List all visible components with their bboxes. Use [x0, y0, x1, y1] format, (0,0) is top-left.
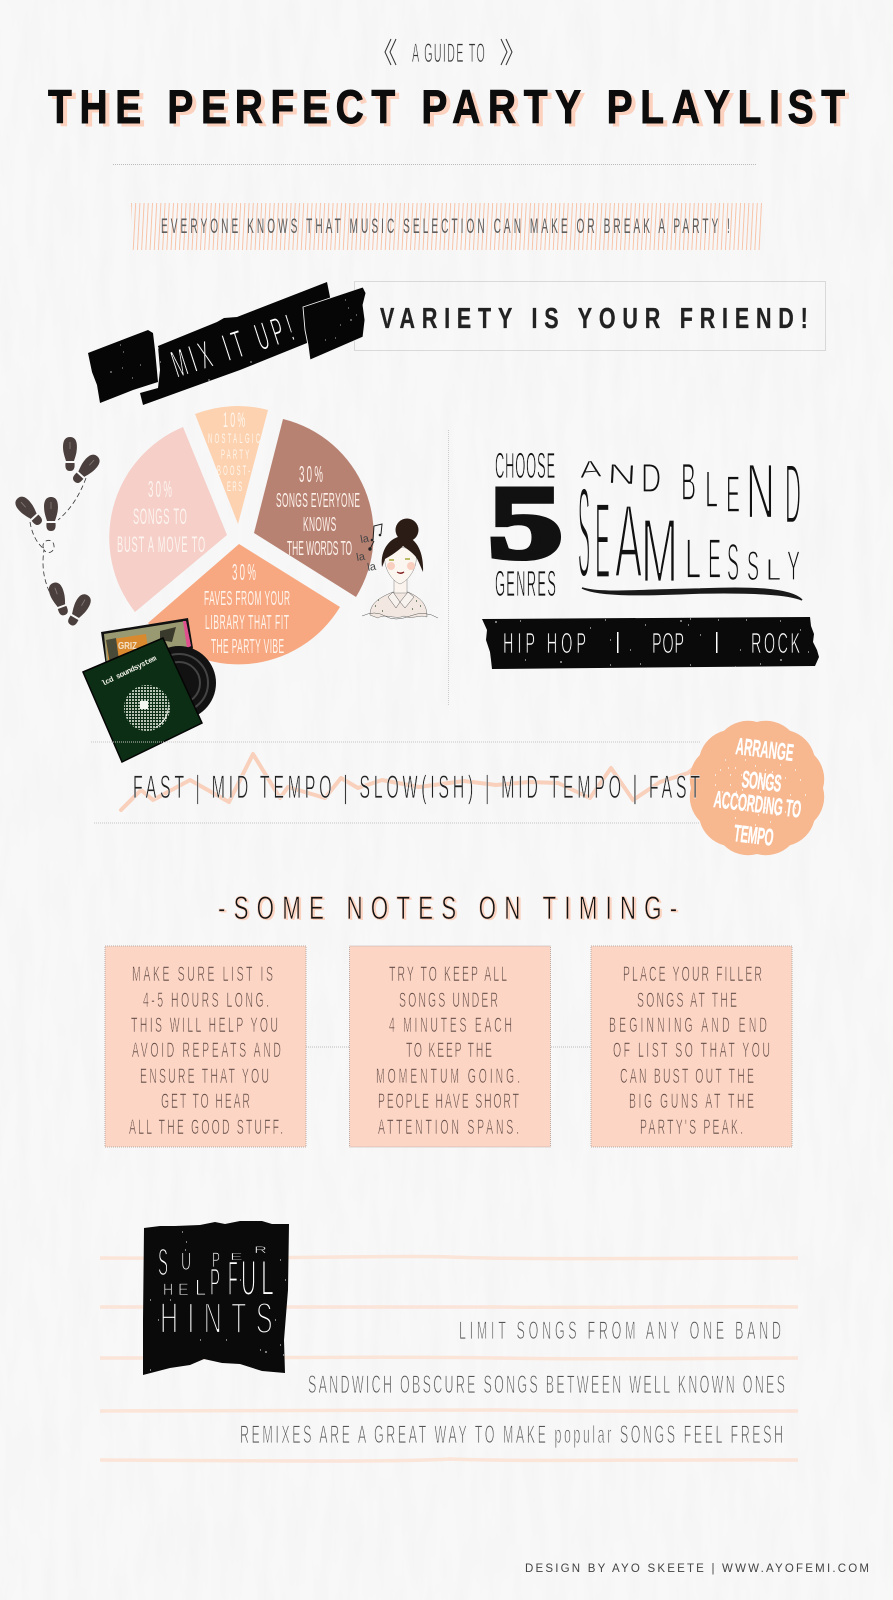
- choose 5 genres: CHOOSE: [495, 446, 555, 486]
- variety callout box: VARIETY IS YOUR FRIEND!: [380, 303, 808, 335]
- ground line: [362, 613, 438, 619]
- choose 5 genres: GENRES: [495, 564, 556, 604]
- griz album: [101, 618, 193, 680]
- hand lettering: and blend seamlessly: A: [579, 456, 603, 484]
- right tape: [303, 287, 366, 360]
- panel: note 2: SONGS UNDER: [399, 988, 498, 1012]
- banner: super helpful hints: U: [181, 1249, 191, 1276]
- panel: note 3: OF LIST SO THAT YOU: [613, 1038, 770, 1062]
- slice: 30% songs to bust a move to: BUST A MOVE TO: [117, 532, 205, 557]
- badge: arrange songs according to tempo: [690, 721, 824, 855]
- music notes: la: [355, 550, 367, 564]
- icon: dancing footprints: [12, 437, 103, 628]
- hand lettering: and blend seamlessly: L: [766, 553, 781, 587]
- hint 1: LIMIT SONGS FROM ANY ONE BAND: [459, 1317, 781, 1345]
- slice: 10% nostalgic party boosters: BOOST-: [217, 463, 250, 479]
- hint 2: SANDWICH OBSCURE SONGS BETWEEN WELL KNOWN ONES: [308, 1371, 785, 1399]
- panel: note 3: [591, 946, 792, 1147]
- hair: [382, 536, 423, 572]
- panel: note 3: BIG GUNS AT THE: [629, 1089, 754, 1113]
- hint 3: REMIXES ARE A GREAT WAY TO MAKE popular SONGS FEEL FRESH: [240, 1421, 783, 1449]
- neck: [394, 578, 407, 593]
- panel: note 1: [105, 946, 306, 1147]
- banner: genres tape: [482, 617, 819, 669]
- griz album: GRIZ: [118, 641, 137, 652]
- hand lettering: and blend seamlessly: L: [705, 461, 718, 519]
- panel: note 1: ALL THE GOOD STUFF.: [129, 1115, 283, 1139]
- intro striped band: EVERYONE KNOWS THAT MUSIC SELECTION CAN MAKE OR BREAK A PARTY !: [161, 215, 730, 238]
- lcd soundsystem sleeve: lcd soundsystem: [101, 655, 159, 689]
- hand lettering: and blend seamlessly: E: [708, 527, 721, 591]
- badge: arrange songs according to tempo: TEMPO: [732, 819, 775, 851]
- banner: genres tape: POP: [652, 626, 684, 659]
- panel: note 2: TRY TO KEEP ALL: [389, 962, 507, 986]
- subtitle: a guide to: [385, 38, 512, 69]
- panel: note 2: [350, 946, 550, 1147]
- panel: note 2: PEOPLE HAVE SHORT: [378, 1089, 519, 1113]
- badge: arrange songs according to tempo: SONGS: [740, 765, 783, 797]
- banner: super helpful hints: H: [163, 1281, 173, 1299]
- hand lettering: and blend seamlessly: B: [681, 452, 696, 512]
- hand lettering: and blend seamlessly: S: [727, 535, 739, 592]
- banner: genres tape: HIP HOP: [503, 626, 586, 659]
- hair bun: [396, 518, 418, 542]
- slice: 30% faves from your library: FAVES FROM YOUR: [204, 588, 290, 610]
- music notes: la: [359, 532, 371, 546]
- hand lettering: and blend seamlessly: A: [615, 482, 642, 599]
- banner: mix it up: [88, 282, 366, 405]
- panel: note 2: 4 MINUTES EACH: [389, 1013, 512, 1037]
- panel: note 2: TO KEEP THE: [406, 1038, 492, 1062]
- slice: 30% faves from your library: [148, 544, 340, 664]
- choose 5 genres: 5: [489, 466, 562, 580]
- banner: super helpful hints: S: [158, 1242, 168, 1284]
- hand lettering: and blend seamlessly: E: [726, 466, 740, 524]
- panel: note 3: PLACE YOUR FILLER: [623, 962, 762, 986]
- intro striped band: [131, 203, 762, 250]
- slice: 30% songs everyone knows the words to: THE WORDS TO: [287, 538, 352, 560]
- banner: super helpful hints: HINTS: [160, 1294, 272, 1343]
- hand lettering: and blend seamlessly: [578, 448, 801, 605]
- music notes: la: [366, 560, 378, 574]
- slice: 30% songs to bust a move to: [109, 427, 227, 612]
- variety callout box: [354, 282, 826, 350]
- banner: super helpful hints: E: [178, 1281, 189, 1299]
- vinyl record: [142, 646, 216, 720]
- panel: note 1: MAKE SURE LIST IS: [132, 962, 273, 986]
- slice: 30% songs to bust a move to: SONGS TO: [133, 504, 187, 529]
- hand lettering: and blend seamlessly: E: [595, 480, 610, 602]
- slice: 10% nostalgic party boosters: NOSTALGIC: [208, 431, 260, 447]
- blouse: [370, 592, 427, 618]
- panel: note 2: MOMENTUM GOING.: [376, 1064, 520, 1088]
- banner: super helpful hints: R: [254, 1245, 267, 1256]
- slice: 30% songs everyone knows the words to: KNOWS: [303, 514, 336, 536]
- banner: super helpful hints: P: [212, 1249, 220, 1272]
- banner: super helpful hints: [143, 1221, 289, 1375]
- icon: record sleeves and vinyl: [83, 618, 216, 762]
- slice: 10% nostalgic party boosters: PARTY: [221, 447, 249, 463]
- panel: note 1: AVOID REPEATS AND: [132, 1038, 281, 1062]
- slice: 30% songs to bust a move to: 30%: [148, 476, 172, 502]
- subtitle: a guide to: A GUIDE TO: [412, 38, 485, 69]
- heading: some notes on timing: -SOME NOTES ON TIMING-: [218, 890, 677, 926]
- title: THE PERFECT PARTY PLAYLIST: [48, 81, 845, 134]
- slice: 30% faves from your library: THE PARTY VIBE: [211, 636, 284, 658]
- banner: super helpful hints: L: [261, 1251, 274, 1307]
- hand lettering: and blend seamlessly: S: [747, 542, 759, 589]
- left tape: [88, 330, 158, 403]
- brush underline: [582, 588, 802, 600]
- hand lettering: and blend seamlessly: L: [685, 526, 701, 591]
- banner: super helpful hints: L: [195, 1276, 206, 1300]
- banner: super helpful hints: E: [230, 1251, 243, 1263]
- music notes: [355, 524, 382, 574]
- slice: 10% nostalgic party boosters: 10%: [223, 409, 245, 432]
- hints list: [240, 1317, 785, 1449]
- chart: pie of song mix: [109, 406, 374, 664]
- panel: note 1: 4-5 HOURS LONG.: [143, 988, 269, 1012]
- lcd soundsystem sleeve: [83, 638, 202, 762]
- face: [385, 548, 416, 584]
- hand lettering: and blend seamlessly: D: [641, 456, 661, 501]
- tempo text: FAST | MID TEMPO | SLOW(ISH) | MID TEMPO | FAST: [133, 770, 700, 806]
- tempo wave line: [121, 754, 700, 810]
- heading: some notes on timing: -SOME NOTES ON TIMING-: [220, 891, 679, 927]
- disco ball: [124, 685, 170, 731]
- hand lettering: and blend seamlessly: M: [641, 501, 678, 602]
- panel: note 1: THIS WILL HELP YOU: [131, 1013, 278, 1037]
- hint rule lines: [100, 1256, 798, 1461]
- banner: mix it up: MIX IT UP!: [167, 307, 299, 387]
- banner: super helpful hints: P: [210, 1262, 220, 1304]
- title: THE PERFECT PARTY PLAYLIST: [52, 84, 849, 137]
- banner: super helpful hints: U: [241, 1251, 256, 1307]
- banner: super helpful hints: F: [228, 1251, 238, 1306]
- banner: genres tape: ROCK: [751, 626, 800, 659]
- badge: arrange songs according to tempo: ARRANGE: [734, 732, 795, 766]
- slice: 10% nostalgic party boosters: [195, 406, 268, 524]
- main tape: [140, 282, 332, 405]
- panel: note 3: SONGS AT THE: [637, 988, 737, 1012]
- hand lettering: and blend seamlessly: Y: [787, 542, 800, 589]
- panel: note 3: PARTY'S PEAK.: [640, 1115, 743, 1139]
- slice: 10% nostalgic party boosters: ERS: [227, 479, 242, 495]
- slice: 30% faves from your library: LIBRARY THAT FIT: [205, 612, 289, 634]
- panel: note 1: ENSURE THAT YOU: [140, 1064, 269, 1088]
- panel: note 2: ATTENTION SPANS.: [378, 1115, 519, 1139]
- hand lettering: and blend seamlessly: N: [746, 449, 775, 536]
- panel: note 1: GET TO HEAR: [161, 1089, 250, 1113]
- cheeks and eyes: [387, 562, 395, 570]
- panel: note 3: BEGINNING AND END: [609, 1013, 767, 1037]
- icon: singing girl: [355, 518, 438, 619]
- hand lettering: and blend seamlessly: D: [785, 448, 801, 542]
- badge: arrange songs according to tempo: ACCORDING TO: [712, 785, 803, 823]
- panel: note 3: CAN BUST OUT THE: [620, 1064, 754, 1088]
- credit: DESIGN BY AYO SKEETE | WWW.AYOFEMI.COM: [525, 1563, 869, 1575]
- slice: 30% faves from your library: 30%: [232, 559, 256, 585]
- hand lettering: and blend seamlessly: N: [607, 459, 637, 491]
- slice: 30% songs everyone knows the words to: SONGS EVERYONE: [276, 490, 360, 512]
- slice: 30% songs everyone knows the words to: [254, 419, 374, 597]
- slice: 30% songs everyone knows the words to: 30%: [299, 461, 323, 487]
- hand lettering: and blend seamlessly: S: [578, 462, 590, 605]
